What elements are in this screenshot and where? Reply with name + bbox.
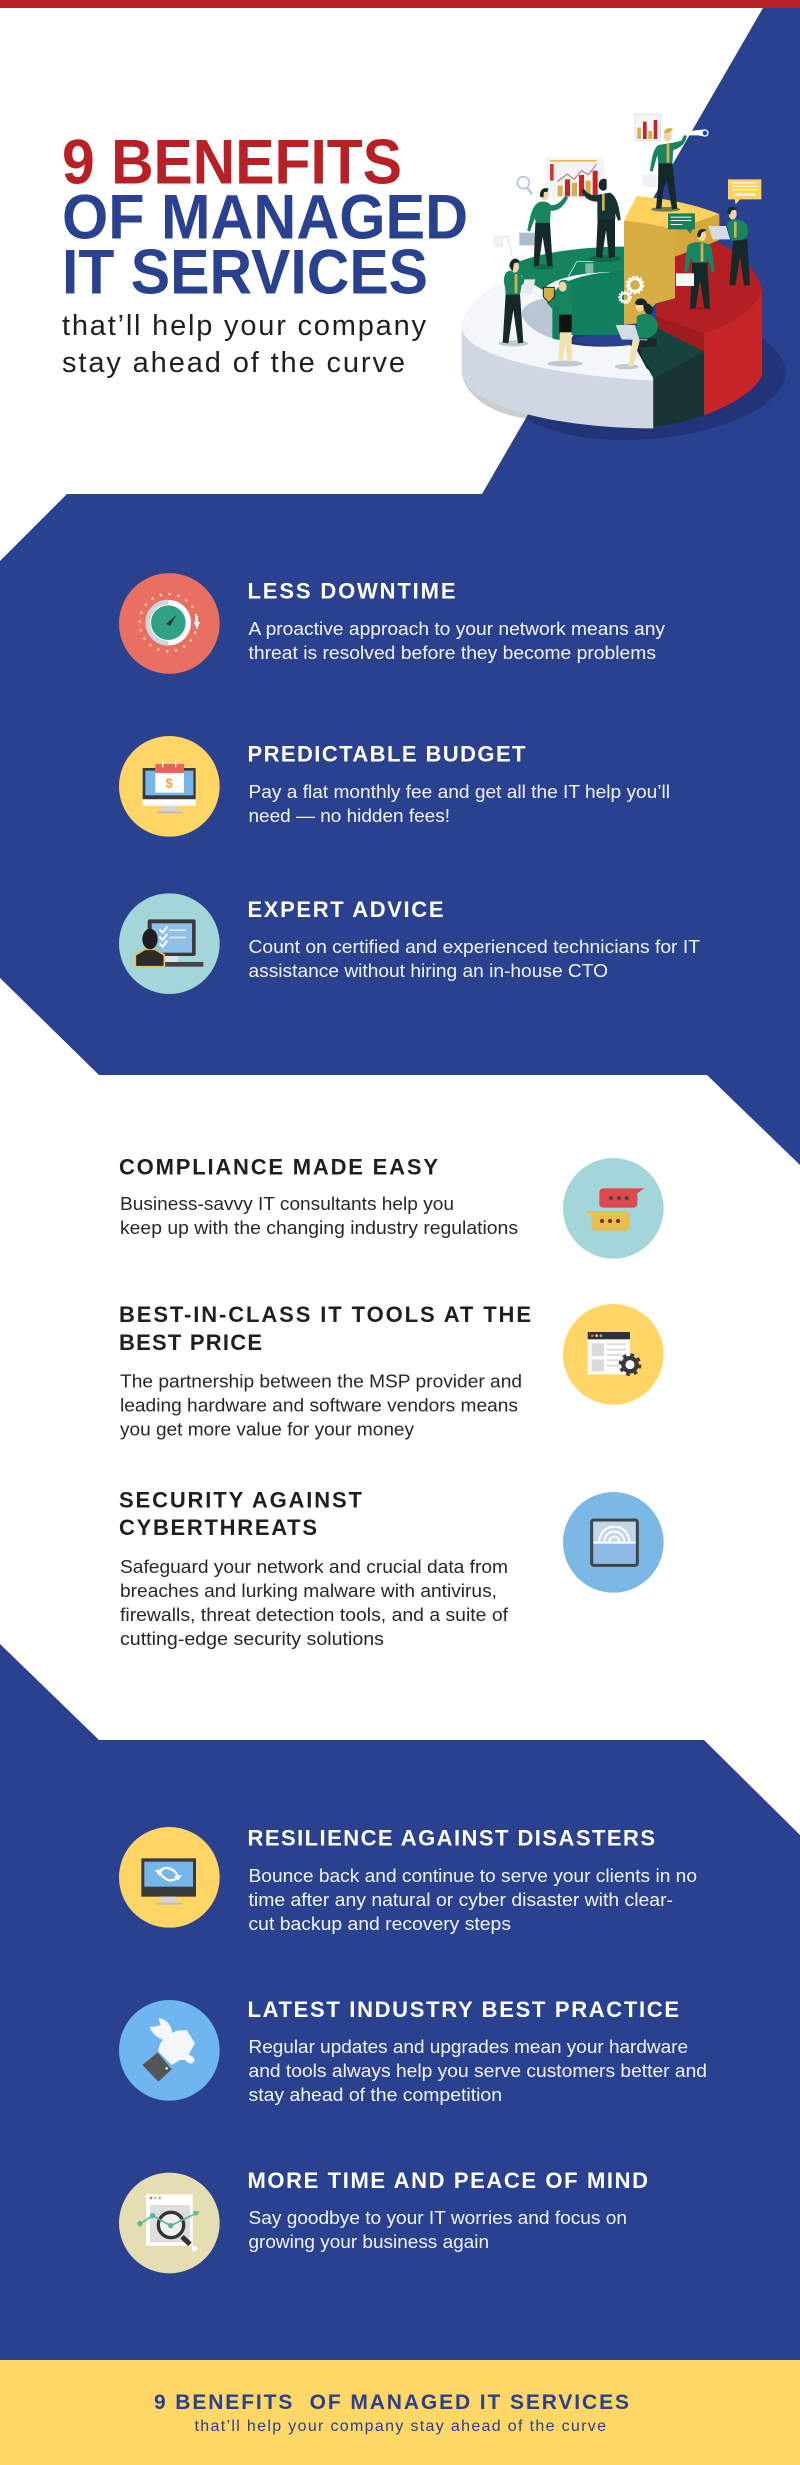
panel: first group of benefits bbox=[119, 573, 700, 994]
title bbox=[62, 128, 468, 308]
benefit: security against cyberthreats bbox=[119, 1488, 664, 1649]
benefit: expert advice bbox=[119, 893, 700, 994]
description: stay ahead of the competition bbox=[248, 2085, 502, 2105]
subtitle: stay ahead of the curve bbox=[62, 347, 405, 379]
description: Pay a flat monthly fee and get all the IT help you’ll bbox=[248, 782, 670, 802]
description: Bounce back and continue to serve your clients in no bbox=[248, 1866, 697, 1886]
person: man with tablet bbox=[493, 236, 593, 346]
person: man with white bag and green speech bubble bbox=[668, 213, 715, 310]
person: woman with shield bbox=[543, 280, 583, 367]
benefit: best-in-class IT tools bbox=[119, 1302, 664, 1440]
icon: technician at computer bbox=[119, 893, 220, 994]
hero illustration: 3D pie chart with business people bbox=[462, 114, 786, 440]
blue background: third panel bbox=[0, 1644, 800, 2360]
heading: MORE TIME AND PEACE OF MIND bbox=[248, 2168, 648, 2193]
heading: LESS DOWNTIME bbox=[248, 578, 456, 604]
description bbox=[120, 1557, 509, 1649]
description: growing your business again bbox=[248, 2232, 489, 2252]
icon: magnifier over report bbox=[119, 2173, 220, 2273]
description: breaches and lurking malware with antivirus, bbox=[120, 1581, 497, 1601]
benefit: predictable budget bbox=[119, 736, 670, 837]
description: leading hardware and software vendors means bbox=[120, 1396, 518, 1416]
heading: COMPLIANCE MADE EASY bbox=[119, 1154, 438, 1180]
person: woman with laptop bbox=[615, 298, 658, 373]
description bbox=[248, 937, 700, 981]
heading: EXPERT ADVICE bbox=[248, 897, 444, 922]
top red bar bbox=[0, 0, 800, 8]
description bbox=[248, 2037, 707, 2105]
icon: monitor and calendar: $ bbox=[165, 776, 173, 790]
description bbox=[120, 1194, 518, 1238]
pie tier: red bbox=[656, 242, 762, 415]
description: Say goodbye to your IT worries and focus on bbox=[248, 2208, 627, 2228]
pie tier: green bbox=[512, 247, 625, 340]
icon: monitor with sync arrows bbox=[119, 1827, 220, 1928]
benefit: resilience against disasters bbox=[119, 1826, 697, 1934]
description: firewalls, threat detection tools, and a suite of bbox=[120, 1605, 509, 1625]
description: Regular updates and upgrades mean your hardware bbox=[248, 2037, 688, 2057]
description: Count on certified and experienced technicians for IT bbox=[248, 937, 700, 957]
description bbox=[248, 2208, 627, 2252]
panel: third group of benefits bbox=[119, 1826, 707, 2273]
icon: monitor and calendar bbox=[119, 736, 220, 837]
heading: LATEST INDUSTRY BEST PRACTICE bbox=[248, 1997, 679, 2022]
description: Business-savvy IT consultants help you bbox=[120, 1194, 454, 1214]
description: keep up with the changing industry regulations bbox=[120, 1218, 518, 1238]
footer band bbox=[0, 2360, 800, 2465]
description: cutting-edge security solutions bbox=[120, 1629, 384, 1649]
heading: BEST-IN-CLASS IT TOOLS AT THE bbox=[119, 1302, 531, 1327]
title: OF MANAGED bbox=[62, 182, 468, 252]
description: assistance without hiring an in-house CTO bbox=[248, 961, 608, 981]
benefit: compliance made easy bbox=[119, 1154, 664, 1259]
heading bbox=[119, 1302, 531, 1355]
icon: browser window and gear bbox=[563, 1304, 664, 1405]
person: man pointing at chart bbox=[519, 188, 568, 269]
icon: chat bubbles bbox=[563, 1158, 664, 1259]
description: threat is resolved before they become problems bbox=[248, 643, 656, 663]
panel: second group of benefits bbox=[119, 1154, 664, 1649]
footer title: 9 BENEFITS OF MANAGED IT SERVICES bbox=[154, 2391, 629, 2414]
icon: stopwatch dial bbox=[119, 573, 220, 674]
subtitle bbox=[62, 310, 426, 379]
description bbox=[120, 1372, 522, 1440]
title: IT SERVICES bbox=[62, 238, 428, 308]
benefit: latest industry best practice bbox=[119, 1997, 707, 2105]
description: time after any natural or cyber disaster with clear- bbox=[248, 1890, 673, 1910]
description: cut backup and recovery steps bbox=[248, 1914, 511, 1934]
chart board behind people bbox=[546, 158, 604, 198]
description: The partnership between the MSP provider and bbox=[120, 1372, 522, 1392]
description: need — no hidden fees! bbox=[248, 806, 450, 826]
icon: hand holding wrench bbox=[119, 2000, 220, 2101]
subtitle: that’ll help your company bbox=[62, 310, 426, 342]
heading: SECURITY AGAINST bbox=[119, 1488, 363, 1512]
heading: PREDICTABLE BUDGET bbox=[248, 742, 526, 766]
magnifier bbox=[517, 177, 532, 194]
description: Safeguard your network and crucial data from bbox=[120, 1557, 508, 1577]
heading: RESILIENCE AGAINST DISASTERS bbox=[248, 1826, 655, 1850]
blue background: hero wedge and first panel bbox=[0, 8, 800, 1165]
person: man with laptop and yellow speech bubble bbox=[708, 179, 761, 286]
description: A proactive approach to your network means any bbox=[248, 619, 665, 639]
description bbox=[248, 782, 670, 826]
footer tagline: that’ll help your company stay ahead of the curve bbox=[194, 2418, 606, 2435]
person: bearded man in suit bbox=[581, 179, 621, 262]
description bbox=[248, 1866, 697, 1934]
benefit: less downtime bbox=[119, 573, 665, 674]
gears bbox=[619, 277, 643, 303]
heading: BEST PRICE bbox=[119, 1330, 262, 1355]
person: man with spyglass and bar chart bbox=[635, 114, 708, 212]
pie shadow bbox=[462, 335, 786, 440]
pie base: white ring bbox=[462, 277, 653, 428]
heading: CYBERTHREATS bbox=[119, 1515, 317, 1540]
description bbox=[248, 619, 665, 663]
pie tier: dark green bbox=[637, 327, 704, 427]
icon: fingerprint scanner bbox=[563, 1492, 664, 1593]
benefit: more time and peace of mind bbox=[119, 2168, 648, 2273]
description: you get more value for your money bbox=[120, 1420, 414, 1440]
pie tier: yellow bbox=[624, 196, 719, 325]
heading bbox=[119, 1488, 363, 1540]
title: 9 BENEFITS bbox=[62, 128, 402, 198]
description: and tools always help you serve customers better and bbox=[248, 2061, 707, 2081]
